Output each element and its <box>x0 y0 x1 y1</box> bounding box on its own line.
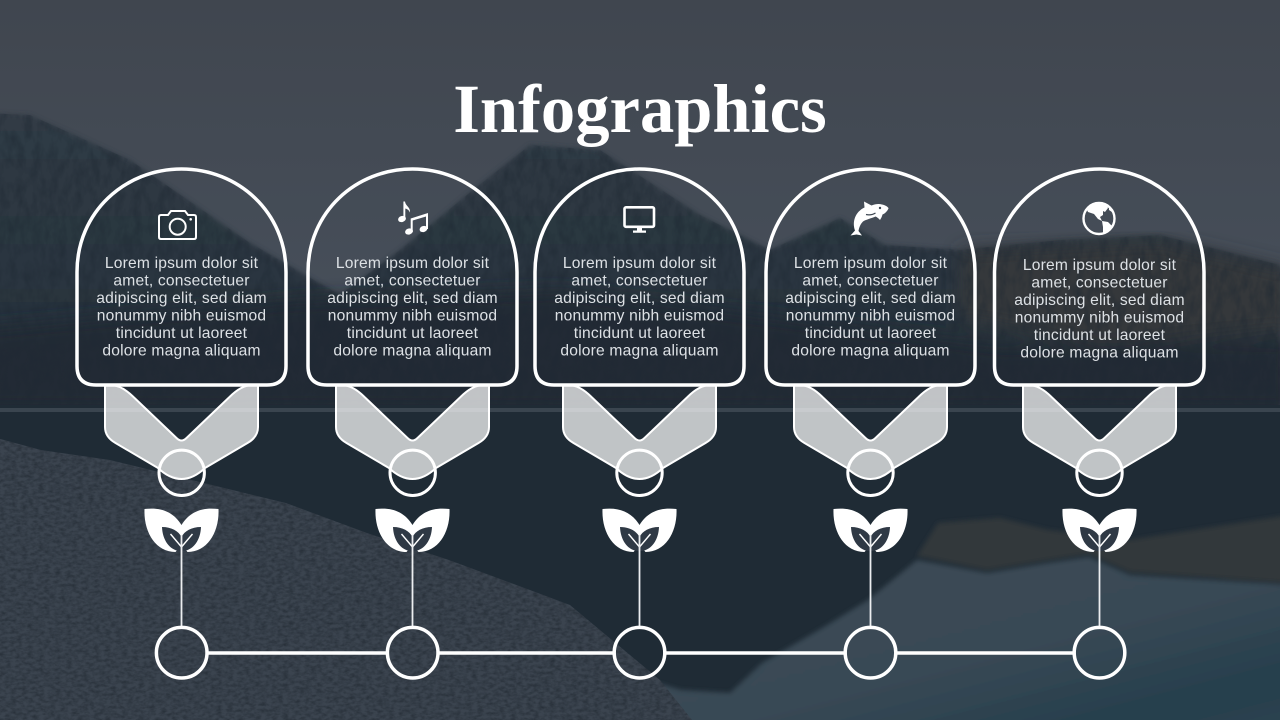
column 1 <box>77 169 286 678</box>
connector shape 1 <box>105 385 258 479</box>
stem 2 <box>412 535 414 627</box>
icon: camera <box>159 211 196 239</box>
node 5 <box>1074 627 1125 678</box>
card 2 text: adipiscing elit, sed diam <box>327 290 498 307</box>
connector shape 2 <box>336 385 489 479</box>
stem 1 <box>180 535 182 627</box>
card 5 text: amet, consectetuer <box>1031 275 1168 292</box>
icon: globe <box>1084 203 1114 235</box>
card 3 text: Lorem ipsum dolor sit <box>563 255 717 272</box>
card 5 text: dolore magna aliquam <box>1020 345 1179 362</box>
small ring 3 <box>617 450 662 495</box>
title: Infographics <box>453 71 827 147</box>
card 1 text: dolore magna aliquam <box>102 343 261 360</box>
card 1 outline <box>77 169 286 385</box>
card 2 text: amet, consectetuer <box>344 273 481 290</box>
column 2 <box>308 169 517 678</box>
card 3 outline <box>535 169 744 385</box>
node 2 <box>387 627 438 678</box>
node 1 <box>156 627 207 678</box>
card 3 text: nonummy nibh euismod <box>555 308 724 325</box>
icon: music notes <box>397 202 428 236</box>
card 2 text: Lorem ipsum dolor sit <box>336 255 490 272</box>
icon: monitor <box>624 207 654 233</box>
card 5 outline <box>994 169 1204 385</box>
card 1 text: amet, consectetuer <box>113 273 250 290</box>
card 4 text: dolore magna aliquam <box>791 343 950 360</box>
small ring 5 <box>1077 450 1122 495</box>
icon: orca <box>850 202 888 236</box>
column 5 <box>994 169 1204 678</box>
card 1 text: Lorem ipsum dolor sit <box>105 255 259 272</box>
card 4 text: Lorem ipsum dolor sit <box>794 255 948 272</box>
card 5 text: adipiscing elit, sed diam <box>1014 292 1185 309</box>
bottom connector line <box>208 651 1073 655</box>
card 4 outline <box>766 169 975 385</box>
connector shape 4 <box>794 385 947 479</box>
card 2 outline <box>308 169 517 385</box>
card 4 text: nonummy nibh euismod <box>786 308 955 325</box>
connector shape 5 <box>1023 385 1176 479</box>
node 4 <box>845 627 896 678</box>
node 3 <box>614 627 665 678</box>
card 5 text: tincidunt ut laoreet <box>1034 327 1166 344</box>
column 3 <box>535 169 744 678</box>
card 1 text: tincidunt ut laoreet <box>116 325 248 342</box>
card 3 text: dolore magna aliquam <box>560 343 719 360</box>
card 4 text: amet, consectetuer <box>802 273 939 290</box>
icon: leaf 3 <box>602 509 677 552</box>
card 2 text: tincidunt ut laoreet <box>347 325 479 342</box>
icon: leaf 4 <box>833 509 908 552</box>
card 3 text: amet, consectetuer <box>571 273 708 290</box>
card 3 text: adipiscing elit, sed diam <box>554 290 725 307</box>
card 4 text: tincidunt ut laoreet <box>805 325 937 342</box>
card 4 text: adipiscing elit, sed diam <box>785 290 956 307</box>
icon: leaf 1 <box>144 509 219 552</box>
card 2 text: dolore magna aliquam <box>333 343 492 360</box>
card 1 text: nonummy nibh euismod <box>97 308 266 325</box>
card 2 text: nonummy nibh euismod <box>328 308 497 325</box>
card 1 text: adipiscing elit, sed diam <box>96 290 267 307</box>
icon: leaf 5 <box>1062 509 1137 552</box>
card 5 text: nonummy nibh euismod <box>1015 310 1184 327</box>
card 5 text: Lorem ipsum dolor sit <box>1023 257 1177 274</box>
card 3 text: tincidunt ut laoreet <box>574 325 706 342</box>
connector shape 3 <box>563 385 716 479</box>
small ring 4 <box>848 450 893 495</box>
small ring 1 <box>159 450 204 495</box>
stem 5 <box>1098 535 1100 627</box>
small ring 2 <box>390 450 435 495</box>
column 4 <box>766 169 975 678</box>
icon: leaf 2 <box>375 509 450 552</box>
stem 3 <box>638 535 640 627</box>
stem 4 <box>870 535 872 627</box>
